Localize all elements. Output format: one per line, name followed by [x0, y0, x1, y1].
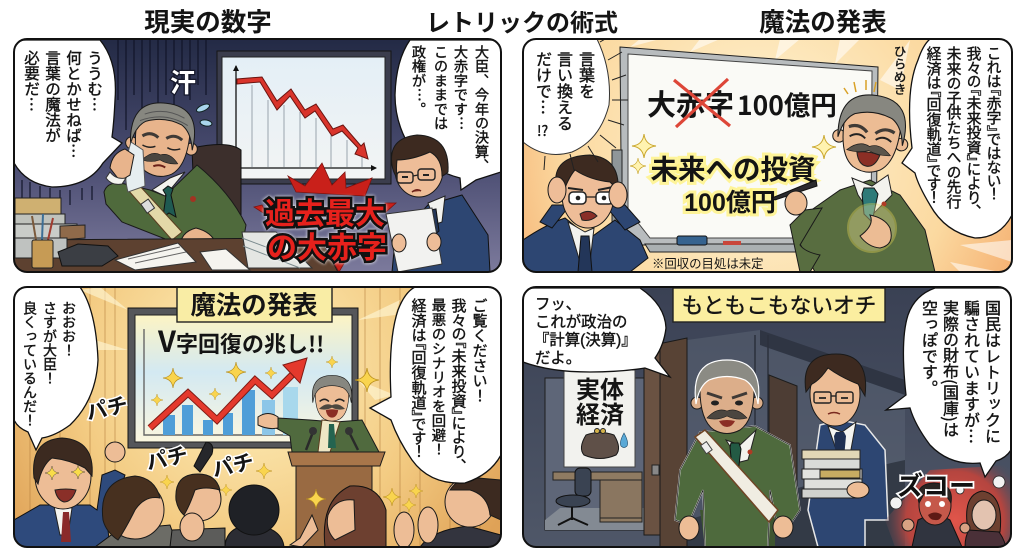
clapping audience	[14, 438, 501, 548]
sound effect: ズコー: ズコー	[897, 466, 975, 503]
speech bubble: audience: さすが大臣！	[40, 301, 60, 385]
heading: レトリックの術式: レトリックの術式	[426, 3, 618, 38]
speech bubble: minister: フッ、	[535, 296, 581, 313]
speech bubble: minister: 言葉の魔法が	[42, 50, 64, 143]
screen title: V字回復の兆し!!: V字回復の兆し!!	[157, 319, 324, 361]
speech bubble: audience: 良くっているんだ！	[20, 301, 40, 427]
microphone	[194, 442, 213, 472]
sound effects: パチ: パチ	[144, 444, 190, 475]
inspiration marks	[844, 80, 876, 94]
sweat drops	[195, 102, 212, 127]
chart monitor	[217, 51, 391, 184]
secretary carrying documents	[802, 354, 888, 547]
heading box: もともこもないオチ: もともこもないオチ	[682, 289, 876, 320]
speech bubble: minister	[370, 287, 501, 483]
wall poster: 実体経済: 経済	[576, 395, 624, 430]
speech bubble: secretary	[886, 288, 1011, 477]
screen sparkles	[151, 356, 338, 406]
ひらめき label: ひらめき	[890, 45, 910, 95]
angry citizens in red glow	[885, 465, 1011, 547]
sound effects: パチ	[84, 394, 256, 482]
speech bubble: secretary: 大赤字です…	[451, 45, 471, 130]
minister with glowing hand and marker	[772, 90, 935, 272]
speech bubble: secretary: 国民はレトリックに	[981, 300, 1005, 444]
secretary panicking	[523, 155, 648, 272]
glowing: 未来への投資100億円	[650, 154, 816, 217]
sparkles	[630, 134, 836, 174]
speech bubble: minister: ううむ…	[84, 50, 106, 112]
red V-shaped recovery arrow	[150, 371, 296, 428]
speech bubble: minister: 何とかせねば…	[63, 50, 85, 159]
speech bubble: secretary: 大臣、今年の決算、	[472, 45, 492, 173]
side sparkle	[355, 368, 379, 392]
whiteboard	[612, 47, 878, 272]
speech bubble: minister: 我々の『未来投資』により、	[448, 298, 470, 466]
presentation screen	[128, 308, 358, 448]
minister wiping sweat	[104, 99, 246, 248]
side room	[545, 370, 645, 530]
panel: 現実の数字	[14, 39, 501, 272]
sound effects: パチ: パチ	[210, 451, 256, 482]
speech bubble: minister: 経済は『回復軌道』です！	[408, 298, 430, 458]
speech bubble: secretary: 騙されていますが…	[960, 300, 984, 444]
speech bubble: secretary	[395, 40, 501, 190]
speech bubble: 言葉を言い換えるだけで: 言い換える	[553, 51, 577, 131]
speech bubble: minister: だよ。	[535, 350, 581, 367]
panel: 魔法の発表	[14, 286, 501, 548]
speech bubble: audience: おおお！	[59, 301, 79, 357]
speech bubble: secretary: 実際の財布(国庫)は	[939, 300, 963, 437]
desk	[553, 472, 642, 522]
headline: 過去最大の大赤字: 過去最大	[265, 198, 385, 231]
corridor door	[769, 375, 797, 510]
stack of documents	[802, 450, 862, 498]
heading: 魔法の発表: 魔法の発表	[759, 2, 887, 39]
wall poster: 実体経済: 実体	[576, 370, 624, 405]
wall poster: 実体経済	[564, 370, 635, 467]
panel: もともこもないオチ	[523, 287, 1011, 547]
crossed out: 大赤字100億円: 100億円	[737, 84, 837, 123]
crossed out: 大赤字100億円	[647, 79, 837, 127]
minister	[675, 360, 800, 547]
speech bubble: minister: これが政治の	[535, 313, 627, 331]
sweat label: 汗	[170, 63, 196, 100]
speech bubble: minister	[523, 288, 670, 377]
speech bubble: minister: 必要だ…	[21, 50, 43, 112]
speech bubble: minister: ご覧ください！	[470, 298, 490, 403]
desk with papers and office items	[14, 198, 338, 272]
speech bubble: minister: 未来の子供たちへの先行	[944, 46, 964, 210]
door	[644, 338, 687, 547]
minister at podium	[258, 375, 385, 547]
audience sparkles	[160, 463, 423, 512]
speech bubble: minister	[14, 40, 122, 187]
minister chair	[192, 144, 242, 216]
red falling arrow	[237, 77, 368, 159]
sound effects: パチ: パチ	[84, 394, 130, 425]
speech bubble: 言葉を言い換えるだけで: 言葉を	[575, 51, 599, 99]
headline: 過去最大の大赤字: の大赤字	[267, 232, 387, 265]
speech bubble: secretary: このままでは	[431, 45, 451, 130]
secretary reading report	[386, 135, 490, 272]
speech bubble: minister	[902, 39, 1012, 238]
speech bubble: 言葉を言い換えるだけで: !?	[537, 121, 548, 141]
speech bubble: minister: これは『赤字』ではない！	[984, 46, 1004, 200]
speech bubble: minister: 最悪のシナリオを回避！	[428, 298, 450, 456]
speech bubble: secretary: 空っぽです。	[918, 300, 942, 396]
headline: 過去最大の大赤字	[265, 198, 387, 265]
speech bubble: secretary: 政権が…。	[409, 45, 429, 116]
panel: レトリックの術式	[523, 35, 1012, 272]
heading: 現実の数字: 現実の数字	[144, 2, 272, 39]
speech bubble: minister: 『計算(決算)』	[534, 330, 637, 349]
heading box: 魔法の発表: 魔法の発表	[191, 286, 317, 322]
shock burst	[254, 163, 396, 272]
speech bubble: audience	[14, 287, 98, 450]
office chair	[556, 468, 591, 525]
crossed out: 大赤字100億円: 大赤字	[647, 82, 734, 124]
speech bubble: minister: 経済は『回復軌道』です！	[924, 46, 944, 203]
speech bubble: 言葉を言い換えるだけで	[523, 35, 628, 170]
speech bubble: minister: 我々の『未来投資』により、	[964, 46, 984, 211]
rising bar chart	[163, 387, 298, 435]
glowing: 未来への投資100億円: 未来への投資	[650, 154, 816, 185]
footnote: ※回収の目処は未定	[652, 254, 764, 272]
glowing: 未来への投資100億円: 100億円	[684, 189, 776, 217]
speech bubble: 言葉を言い換えるだけで: だけで…	[532, 51, 556, 115]
